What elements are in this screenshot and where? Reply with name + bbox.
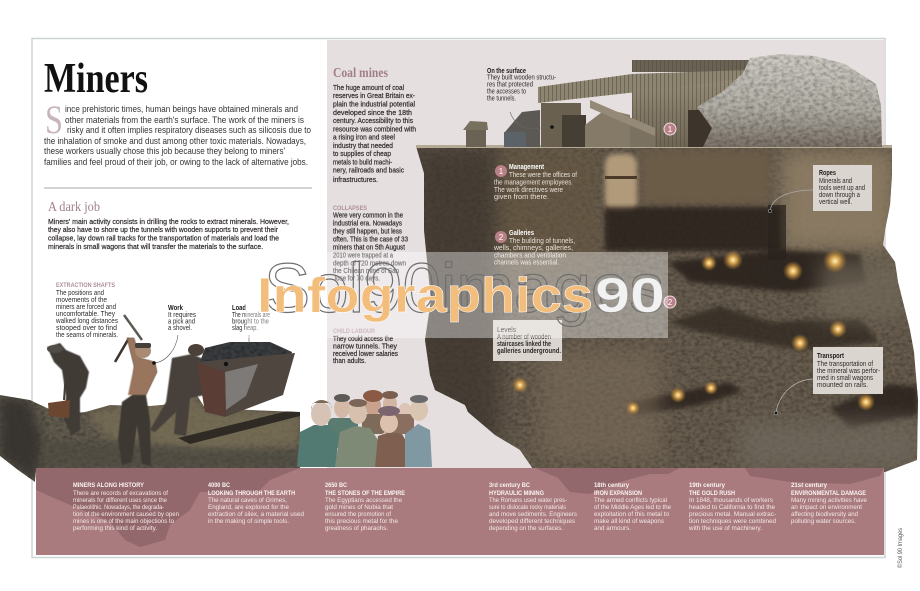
timeline: 2650 BC: The Egyptians accessed the bbox=[325, 497, 402, 504]
timeline: 3rd century BC: The Romans used water pres- bbox=[489, 497, 567, 504]
callout: transport: Transport bbox=[817, 353, 845, 360]
text: a dark job: collapse, lay down rail tracks for the transportation of materials and load the bbox=[48, 234, 279, 242]
callout: load: brought to the bbox=[232, 318, 269, 326]
callout: on the surface: They built wooden structu- bbox=[487, 74, 557, 82]
text: child labour bbox=[333, 328, 398, 365]
intro text: families and feel proud of their job, or owing to the lack of alternative jobs. bbox=[44, 156, 308, 167]
text: extraction shafts: uncomfortable. They bbox=[56, 311, 115, 318]
timeline: 4000 BC: The natural caves of Grimes, bbox=[208, 497, 287, 504]
text: a dark job: minerals in small wagons that will transfer the materials to the surface. bbox=[48, 242, 263, 251]
text: a dark job bbox=[48, 217, 289, 251]
intro text: these workers usually chose this job because they belong to miners' bbox=[44, 145, 285, 156]
timeline: 3rd century BC: and move sediments. Engineers bbox=[489, 511, 578, 518]
timeline: 21st century: polluting water sources. bbox=[791, 518, 856, 525]
timeline: miners along history bbox=[73, 482, 179, 532]
intro text: the inhalation of smoke and dust among other toxic materials. Nowadays, bbox=[44, 135, 306, 146]
band darker rock shadows bbox=[36, 468, 884, 547]
text: management: 1 bbox=[499, 167, 504, 176]
timeline: 19th century: tion techniques were combined bbox=[689, 518, 776, 525]
callout: load bbox=[232, 305, 270, 343]
timeline: 18th century: The armed conflicts typical bbox=[594, 497, 667, 504]
drop cap: S bbox=[45, 97, 63, 142]
rock mass bbox=[416, 146, 918, 472]
text: child labour: received lower salaries bbox=[333, 349, 398, 358]
callout: work: a shovel. bbox=[168, 325, 192, 332]
timeline: 19th century: THE GOLD RUSH bbox=[689, 490, 735, 497]
text: coal mines: nery, railroads and basic bbox=[333, 166, 404, 174]
text: management bbox=[494, 164, 577, 201]
callout: transport: the mineral was perfor- bbox=[817, 368, 881, 375]
text: management: Management bbox=[509, 164, 545, 171]
callout: work bbox=[152, 305, 196, 365]
panel: coal mines background bbox=[327, 40, 884, 468]
illustration: surface buildings bbox=[463, 60, 752, 147]
timeline: 4000 BC: England, are explored for the bbox=[208, 504, 289, 511]
callout: transport bbox=[774, 347, 883, 415]
timeline: 21st century: affecting biodiversity and bbox=[791, 511, 858, 518]
text: extraction shafts: walked long distances bbox=[55, 318, 118, 325]
text: coal mines: resource was combined with bbox=[333, 124, 416, 134]
text: management: These were the offices of bbox=[509, 172, 577, 179]
text: a dark job: they also have to shore up the tunnels with wooden supports to prevent their bbox=[48, 225, 278, 234]
text: galleries: The building of tunnels, bbox=[509, 238, 575, 245]
text: collapses: COLLAPSES bbox=[333, 205, 367, 212]
text: coal mines: reserves in Great Britain ex- bbox=[333, 91, 415, 100]
callout: on the surface: res that protected bbox=[487, 82, 533, 88]
timeline: 19th century: precious metal. Manual extrac- bbox=[689, 511, 776, 518]
timeline: 3rd century BC: developed different techniques bbox=[489, 518, 576, 525]
text: extraction shafts bbox=[55, 282, 118, 339]
callout: levels: A number of wooden bbox=[497, 334, 551, 341]
text: coal mines: a rising iron and steel bbox=[333, 132, 395, 142]
text: galleries: wells, chimneys, galleries, bbox=[493, 245, 573, 252]
timeline: 18th century bbox=[594, 482, 671, 532]
timeline: 19th century: 19th century bbox=[689, 482, 725, 489]
text: extraction shafts: The positions and bbox=[56, 290, 104, 297]
text: child labour: than adults. bbox=[333, 356, 366, 365]
timeline: 18th century: and armours. bbox=[594, 525, 631, 532]
timeline: 2650 BC: gold mines of Nubia that bbox=[325, 504, 393, 511]
timeline: 4000 BC: LOOKING THROUGH THE EARTH bbox=[208, 490, 295, 497]
title: Miners bbox=[44, 56, 148, 102]
text: management: given from there. bbox=[494, 194, 549, 201]
intro text bbox=[44, 103, 311, 167]
callout: ropes: down through a bbox=[819, 192, 860, 199]
timeline: 2650 BC: this precious metal for the bbox=[325, 518, 398, 525]
heading: coal mines: Coal mines bbox=[333, 65, 388, 80]
callout: ropes: Ropes bbox=[819, 170, 836, 177]
timeline: 4000 BC bbox=[208, 482, 304, 525]
timeline: 4000 BC: in the making of simple tools. bbox=[208, 518, 289, 525]
timeline: 21st century bbox=[791, 482, 867, 525]
text: collapses: the Chilean mine of San bbox=[333, 266, 399, 275]
timeline: 21st century: 21st century bbox=[791, 482, 827, 489]
callout: work: It requires bbox=[168, 312, 196, 319]
text: collapses: depth of 720 metres down bbox=[333, 258, 406, 268]
text: collapses bbox=[333, 205, 408, 282]
illustration: miner pushing wagon bbox=[150, 344, 226, 436]
text: collapses: industrial era. Nowadays bbox=[333, 218, 402, 228]
text: coal mines: developed since the 18th bbox=[333, 108, 412, 117]
intro text: other materials from the earth's surface. The work of the miners is bbox=[65, 114, 304, 125]
callout: on the surface: the accesses to bbox=[487, 88, 526, 96]
intro text: risky and it often implies respiratory diseases such as silicosis due to bbox=[67, 124, 311, 135]
timeline: miners along history: performing this kind of activity. bbox=[73, 525, 157, 532]
illustration: miner with shovel bbox=[47, 343, 89, 435]
text: collapses: Were very common in the bbox=[333, 210, 403, 220]
timeline: miners along history: MINERS ALONG HISTORY bbox=[73, 482, 145, 489]
callout: levels: Levels bbox=[497, 327, 516, 334]
text: galleries bbox=[493, 230, 575, 266]
timeline: miners along history: minerals for different uses since the bbox=[73, 497, 167, 504]
timeline: 18th century: exploitation of this metal to bbox=[594, 511, 669, 518]
text: galleries: Galleries bbox=[509, 230, 534, 237]
text: a dark job: Miners' main activity consists in drilling the rocks to extract minerals. However, bbox=[48, 217, 289, 226]
callout: load: Load bbox=[232, 305, 246, 312]
text: coal mines: industry that needed bbox=[333, 141, 393, 150]
text: coal mines: plain the industrial potential bbox=[333, 100, 415, 108]
intro text: ince prehistoric times, human beings have obtained minerals and bbox=[65, 103, 298, 114]
timeline: 21st century: an impact on environment bbox=[791, 504, 862, 511]
timeline: 18th century: make all kind of weapons bbox=[594, 518, 665, 525]
callout: transport: mounted on rails. bbox=[817, 382, 868, 389]
illustration: miner with pick bbox=[115, 315, 157, 466]
callout: ropes: vertical well. bbox=[819, 199, 852, 206]
callout: on the surface: the tunnels. bbox=[487, 96, 516, 102]
rock shading bbox=[410, 146, 920, 470]
text: collapses: miners that on 5th August bbox=[333, 242, 405, 252]
badge: galleries 2 bbox=[664, 296, 676, 308]
timeline: 4000 BC: extraction of silex, a material used bbox=[208, 511, 304, 518]
callout: transport: The transportation of bbox=[817, 361, 873, 368]
text: galleries: channels was essential. bbox=[494, 260, 559, 266]
timeline: miners along history: tion of the environment caused by open bbox=[73, 511, 179, 518]
timeline: 21st century: ENVIRONMENTAL DAMAGE bbox=[791, 490, 867, 497]
callout: work: Work bbox=[168, 305, 183, 312]
text: galleries: chambers and ventilation bbox=[494, 252, 566, 260]
text: collapses: often. This is the case of 33 bbox=[333, 234, 408, 244]
text: coal mines: The huge amount of coal bbox=[333, 83, 404, 92]
illustration: coal wagon bbox=[197, 342, 295, 417]
illustration: waste heap bbox=[697, 54, 882, 147]
callout: ropes bbox=[768, 165, 872, 213]
illustration: mine cross-section bbox=[410, 145, 920, 472]
text: management: the management employees. bbox=[494, 180, 573, 186]
text: coal mines: metals to build machi- bbox=[333, 158, 392, 166]
badge: surface 1: 1 bbox=[668, 125, 673, 134]
text: extraction shafts: movements of the bbox=[56, 297, 107, 304]
text: collapses: Jose for 70 days. bbox=[333, 274, 380, 282]
text: collapses: 2010 were trapped at a bbox=[333, 250, 394, 260]
badge: surface 1 bbox=[664, 123, 676, 135]
text: extraction shafts: the seams of minerals. bbox=[56, 332, 118, 339]
text: extraction shafts: miners are forced and bbox=[56, 304, 116, 311]
text: child labour: CHILD LABOUR bbox=[333, 328, 375, 335]
timeline: 19th century: with the use of machinery. bbox=[688, 525, 762, 532]
text: extraction shafts: stooped over to find bbox=[56, 325, 117, 332]
timeline: 2650 BC: ensured the promotion of bbox=[325, 511, 391, 518]
text: coal mines: century. Accessibility to this bbox=[333, 116, 413, 125]
watermark: Sol90images bbox=[264, 249, 664, 327]
text: coal mines: to supplies of cheap bbox=[333, 149, 391, 158]
callout: on the surface bbox=[487, 68, 557, 129]
text: coal mines: infrastructures. bbox=[333, 175, 378, 184]
timeline: 3rd century BC bbox=[489, 482, 578, 532]
heading: a dark job: A dark job bbox=[48, 200, 100, 215]
timeline: 4000 BC: 4000 BC bbox=[208, 482, 230, 489]
badge: galleries 2: 2 bbox=[668, 298, 673, 307]
timeline: miners along history: Palaeolithic. Nowadays, the degrada- bbox=[73, 504, 164, 511]
timeline: 3rd century BC: depending on the surfaces. bbox=[489, 525, 563, 532]
timeline: 2650 BC: 2650 BC bbox=[325, 482, 347, 489]
timeline: 18th century: of the Middle Ages led to the bbox=[594, 504, 671, 511]
timeline: 3rd century BC: HYDRAULIC MINING bbox=[489, 490, 544, 497]
lamps bbox=[702, 256, 716, 270]
callout: work: a pick and bbox=[168, 318, 195, 326]
timeline: 3rd century BC: sure to dislocate rocky materials bbox=[489, 504, 567, 511]
timeline: 2650 BC: THE STONES OF THE EMPIRE bbox=[325, 490, 405, 497]
callout: ropes: tools went up and bbox=[819, 185, 865, 192]
text: child labour: narrow tunnels. They bbox=[333, 342, 397, 350]
timeline: 21st century: Many mining activities have bbox=[791, 497, 867, 504]
watermark: Infographics bbox=[257, 269, 593, 323]
callout: levels bbox=[493, 320, 562, 361]
timeline: miners along history: mines is one of the main objections to bbox=[73, 518, 174, 525]
rose band bbox=[36, 468, 884, 555]
callout: load: slag heap. bbox=[232, 325, 258, 332]
text: galleries: 2 bbox=[499, 233, 504, 242]
text: collapses: they still happen, but less bbox=[333, 226, 402, 236]
image credit: ©Sol 90 Images bbox=[896, 527, 904, 568]
illustration: group of child labourers bbox=[297, 390, 432, 467]
callout: levels: staircases linked the bbox=[497, 341, 551, 348]
text: child labour: They could access the bbox=[333, 334, 393, 343]
watermark: 90 bbox=[595, 269, 665, 323]
timeline: 3rd century BC: 3rd century BC bbox=[489, 482, 530, 489]
timeline: 19th century: headed to California to find the bbox=[689, 504, 775, 511]
surface crust bbox=[416, 145, 892, 148]
timeline: 2650 BC: greatness of pharaohs. bbox=[325, 525, 388, 532]
timeline: 19th century: In 1848, thousands of workers bbox=[689, 497, 774, 504]
callout: ropes: Minerals and bbox=[819, 178, 852, 185]
timeline: miners along history: There are records of excavations of bbox=[73, 490, 168, 497]
callout: transport: med in small wagons bbox=[817, 375, 873, 382]
callout: load: The minerals are bbox=[232, 312, 270, 319]
timeline: 18th century: 18th century bbox=[594, 482, 629, 489]
timeline: 19th century bbox=[688, 482, 776, 532]
text: extraction shafts: EXTRACTION SHAFTS bbox=[56, 282, 115, 289]
text: coal mines bbox=[333, 83, 416, 184]
timeline: 2650 BC bbox=[325, 482, 405, 532]
timeline: 18th century: IRON EXPANSION bbox=[594, 490, 642, 497]
ground with rails bbox=[0, 392, 300, 482]
callout: levels: galleries underground. bbox=[497, 348, 561, 355]
callout: on the surface: On the surface bbox=[487, 68, 526, 75]
text: management: The work directives were bbox=[494, 187, 563, 194]
